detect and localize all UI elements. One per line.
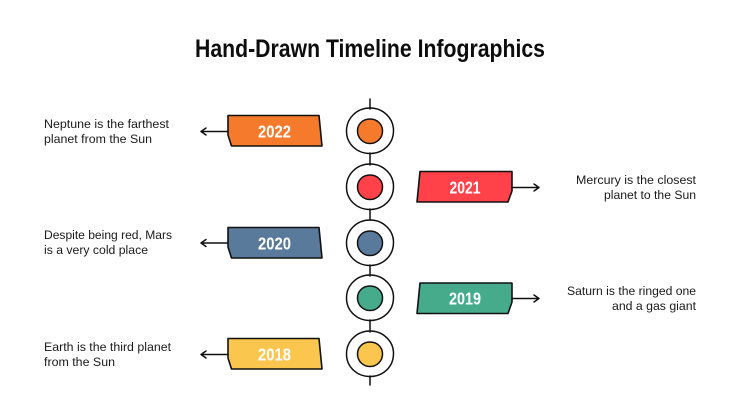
text: Neptune [44, 117, 170, 146]
arrow: 2019 [512, 295, 539, 302]
timeline node: 2022 [346, 108, 394, 154]
arrow: 2022 [201, 128, 228, 135]
timeline node: 2021 [346, 164, 394, 210]
tag: 2021 [417, 172, 512, 202]
tag: 2019 [417, 283, 512, 314]
tag: 2018 [228, 338, 322, 369]
timeline node: 2019 [346, 275, 394, 320]
tag: 2020: 2020 [258, 234, 291, 254]
title: Hand-Drawn Timeline Infographics [195, 35, 545, 63]
timeline axis [369, 99, 371, 385]
text: Neptune: Neptune is the farthest [44, 117, 170, 131]
text: Saturn: Saturn is the ringed one [567, 284, 696, 298]
timeline node: 2020 [346, 220, 394, 266]
text: Saturn [567, 284, 697, 313]
text: Neptune: planet from the Sun [44, 132, 152, 146]
text: Saturn: and a gas giant [612, 299, 697, 313]
timeline node: 2018 [346, 331, 394, 376]
text: Earth: Earth is the third planet [44, 340, 172, 354]
tag: 2018: 2018 [258, 344, 291, 364]
tag: 2022 [228, 116, 322, 146]
arrow: 2021 [512, 184, 539, 191]
tag: 2019: 2019 [449, 288, 481, 308]
text: Mars: is a very cold place [44, 243, 148, 257]
tag: 2020 [228, 228, 322, 258]
tag: 2021: 2021 [450, 178, 481, 198]
text: Mars [44, 228, 172, 257]
tag: 2022: 2022 [258, 122, 291, 142]
arrow: 2020 [201, 240, 228, 246]
text: Earth: from the Sun [44, 355, 115, 369]
text: Mercury [576, 173, 697, 202]
text: Earth [44, 340, 172, 369]
arrow: 2018 [201, 351, 228, 358]
text: Mars: Despite being red, Mars [44, 228, 172, 242]
text: Mercury: planet to the Sun [604, 188, 696, 202]
text: Mercury: Mercury is the closest [576, 173, 697, 187]
